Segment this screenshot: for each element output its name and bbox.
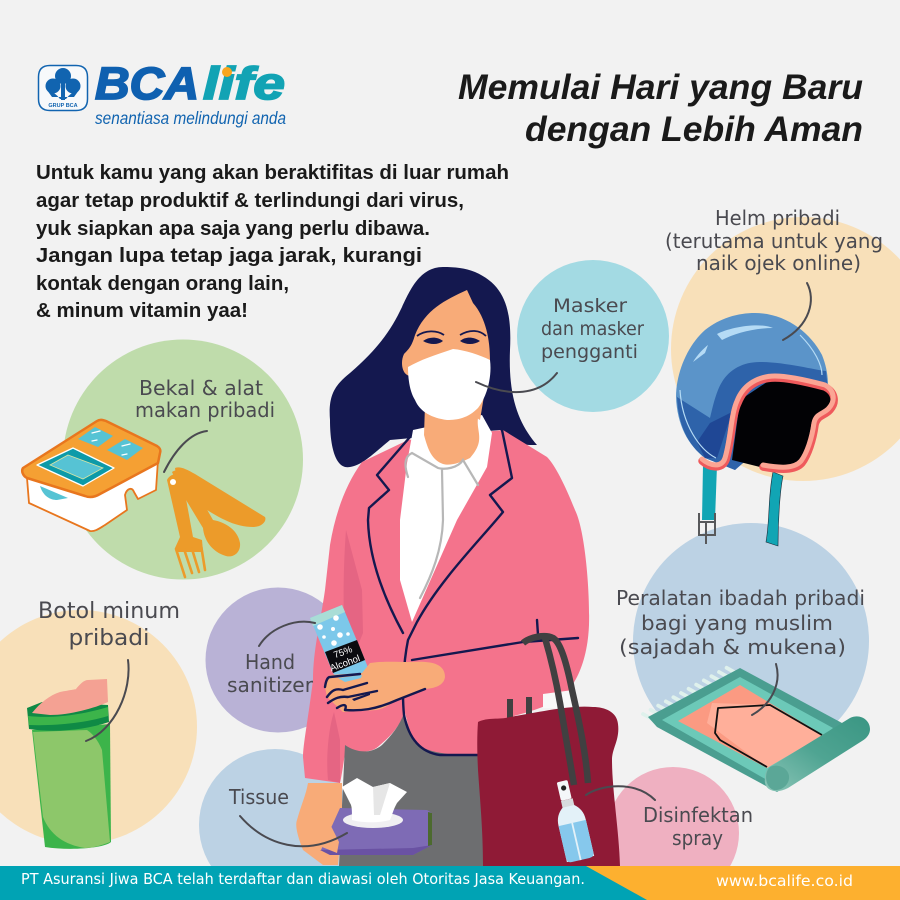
hair xyxy=(330,267,537,467)
box clip xyxy=(40,486,68,500)
lid large compartment xyxy=(37,448,114,486)
footer orange band xyxy=(0,866,900,900)
hand sanitizer pack xyxy=(310,605,372,690)
label: disinfectant xyxy=(643,803,753,850)
helmet xyxy=(676,313,834,546)
background circle: hand sanitizer xyxy=(206,588,350,732)
mat salmon field xyxy=(678,685,823,768)
label: bottle xyxy=(38,599,180,651)
label: mask xyxy=(541,295,644,363)
label: sanitizer: Hand xyxy=(245,650,295,674)
jacket lapel lines xyxy=(368,430,512,755)
intro paragraph: yuk siapkan apa saja yang perlu dibawa. xyxy=(36,217,430,240)
label: prayer: bagi yang muslim xyxy=(641,611,833,635)
lunch box xyxy=(22,420,160,531)
footer teal band xyxy=(0,866,647,900)
jacket xyxy=(303,430,589,783)
title xyxy=(458,68,863,149)
spray bottle xyxy=(549,778,594,863)
mat roll end xyxy=(766,766,789,790)
helmet highlights xyxy=(717,325,773,340)
footer notice: PT Asuransi Jiwa BCA telah terdaftar dan diawasi oleh Otoritas Jasa Keuangan. xyxy=(21,870,585,888)
box lid xyxy=(22,420,160,497)
bag handles xyxy=(523,636,588,785)
logo orange dot xyxy=(222,67,232,77)
mat inner border xyxy=(662,677,833,780)
intro paragraph xyxy=(36,161,509,322)
face xyxy=(402,290,490,420)
knife xyxy=(175,467,265,527)
label: bottle: Botol minum xyxy=(38,599,180,624)
label: prayer: Peralatan ibadah pribadi xyxy=(616,586,865,610)
helmet straps xyxy=(702,465,717,520)
neck xyxy=(424,405,480,465)
background circle: food xyxy=(63,340,303,580)
sleeve shading xyxy=(327,530,363,783)
bottle body xyxy=(32,724,111,849)
label: mask: dan masker xyxy=(541,318,644,340)
helmet buckle xyxy=(699,513,715,544)
logo tagline: senantiasa melindungi anda xyxy=(95,108,286,128)
mat roll xyxy=(765,716,870,791)
label: disinfectant: Disinfektan xyxy=(643,803,753,827)
footer website: www.bcalife.co.id xyxy=(716,872,853,890)
collar xyxy=(405,453,478,598)
label: helmet xyxy=(665,206,883,275)
label: disinfectant: spray xyxy=(672,826,723,850)
logo wordmark BCA: BCA xyxy=(95,58,199,109)
helmet shell xyxy=(676,313,828,470)
background circle: prayer kit xyxy=(633,523,869,759)
label: tissue: Tissue xyxy=(228,785,289,809)
label: helmet: (terutama untuk yang xyxy=(665,229,883,253)
shirt xyxy=(400,415,492,622)
label: food: Bekal & alat xyxy=(139,376,263,400)
background circle: helmet xyxy=(671,217,900,481)
label: mask: pengganti xyxy=(541,341,638,363)
box body xyxy=(27,460,158,531)
logo: BCA life xyxy=(38,58,286,128)
label: food xyxy=(135,376,275,422)
logo wordmark life: life xyxy=(203,58,285,109)
label: prayer: (sajadah & mukena) xyxy=(619,635,846,659)
tote bag xyxy=(477,636,620,866)
background circle: disinfectant xyxy=(607,767,739,899)
tissue box xyxy=(320,778,432,855)
label: sanitizer: sanitizer xyxy=(227,673,314,697)
label: bottle: pribadi xyxy=(68,626,150,651)
prayer mat xyxy=(643,668,870,792)
label: sanitizer xyxy=(227,650,314,697)
mat prayer arch xyxy=(715,705,822,767)
eyes and brows xyxy=(417,331,486,344)
intro paragraph: & minum vitamin yaa! xyxy=(36,299,248,322)
lower hand xyxy=(296,783,342,865)
title: Memulai Hari yang Baru xyxy=(458,68,863,107)
label: prayer xyxy=(616,586,865,659)
woman figure xyxy=(296,267,589,866)
intro paragraph: Untuk kamu yang akan beraktifitas di luar rumah xyxy=(36,161,509,184)
background circle: mask xyxy=(517,260,669,412)
hand sanitizer pack: 75% xyxy=(332,644,354,661)
fork xyxy=(167,474,203,552)
skirt xyxy=(339,713,484,866)
bag tabs and shirt patch xyxy=(543,690,578,708)
spoon xyxy=(172,470,240,556)
background circle: bottle xyxy=(0,610,197,844)
background circle: tissue xyxy=(199,749,351,900)
helmet rim xyxy=(702,378,834,469)
footer bar xyxy=(0,866,900,900)
intro paragraph: Jangan lupa tetap jaga jarak, kurangi xyxy=(36,244,422,267)
mat outer border xyxy=(648,668,842,792)
mask xyxy=(408,349,490,420)
lid highlights xyxy=(92,431,130,455)
sleeve line xyxy=(412,620,578,660)
label: food: makan pribadi xyxy=(135,398,275,422)
callout lines xyxy=(86,283,811,846)
bottle lid xyxy=(32,679,108,715)
logo emblem: GRUP BCA xyxy=(48,103,78,109)
hand sanitizer pack: Alcohol xyxy=(329,653,362,674)
mat fringe xyxy=(643,668,736,719)
holding hand xyxy=(325,662,445,712)
label: helmet: naik ojek online) xyxy=(696,251,861,275)
intro paragraph: kontak dengan orang lain, xyxy=(36,272,289,295)
cutlery xyxy=(167,467,265,577)
logo emblem xyxy=(38,66,88,110)
helmet band xyxy=(677,362,828,470)
label: mask: Masker xyxy=(553,295,627,317)
bottle band xyxy=(27,702,109,731)
label: helmet: Helm pribadi xyxy=(715,206,840,230)
title: dengan Lebih Aman xyxy=(525,110,863,149)
bottle xyxy=(27,679,111,849)
helmet opening xyxy=(732,380,832,467)
bag body xyxy=(477,707,620,866)
lid small compartments xyxy=(78,427,113,447)
intro paragraph: agar tetap produktif & terlindungi dari virus, xyxy=(36,189,464,212)
